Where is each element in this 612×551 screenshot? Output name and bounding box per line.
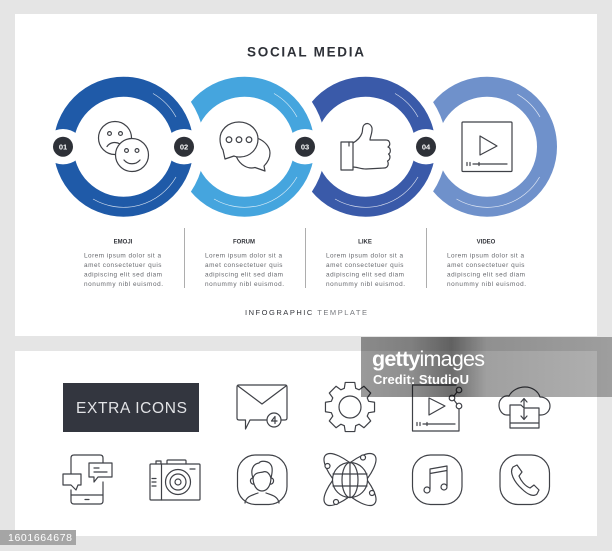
extra icons label	[63, 383, 199, 432]
column text: video: amet consectetuer quis	[447, 262, 524, 269]
icon: mobile chat	[63, 455, 112, 504]
column text: emoji: nonummy nibl euismod.	[84, 281, 163, 288]
panel: social media infographic	[15, 14, 597, 336]
watermark: getty images	[361, 337, 612, 397]
badge 03	[295, 137, 315, 157]
badge 04	[416, 137, 436, 157]
icon: camera	[150, 460, 200, 500]
watermark: getty images: gettyimages	[372, 347, 485, 371]
column text: video: nonummy nibl euismod.	[447, 281, 526, 288]
column text: like: amet consectetuer quis	[326, 262, 404, 269]
icon: video player	[462, 122, 512, 172]
column text: emoji: Lorem ipsum dolor sit a	[84, 252, 161, 260]
icon: music	[412, 455, 462, 504]
column text: forum: FORUM	[233, 239, 255, 245]
icon: mail bubble	[237, 385, 287, 429]
ring 2	[184, 87, 304, 207]
footer label: INFOGRAPHIC TEMPLATE	[245, 308, 367, 317]
column text: forum: Lorem ipsum dolor sit a	[205, 252, 282, 260]
badge 01: 01	[59, 142, 67, 152]
panel: extra icons	[15, 351, 597, 536]
watermark: getty images: Credit: StudioU	[373, 372, 469, 387]
badge 04: 04	[422, 142, 431, 152]
icon: video share	[412, 385, 462, 431]
column text: forum	[205, 239, 284, 288]
column text: forum: amet consectetuer quis	[205, 262, 282, 269]
icon: emoji faces	[98, 122, 148, 172]
ring chain	[42, 66, 547, 228]
badge 02	[174, 137, 194, 157]
column text: forum: adipiscing elit sed diam	[205, 272, 283, 278]
ring 1	[64, 87, 184, 207]
icon: globe network	[317, 446, 383, 513]
icon: thumbs up	[341, 124, 390, 170]
watermark: image id: 1601664678	[8, 532, 72, 544]
column text: emoji: adipiscing elit sed diam	[84, 272, 162, 278]
icon: gear	[325, 382, 375, 432]
column text: like	[326, 239, 405, 288]
column text: video: VIDEO	[477, 239, 496, 245]
column text: emoji: EMOJI	[114, 239, 133, 245]
icon: cloud transfer	[499, 387, 550, 428]
column text: like: adipiscing elit sed diam	[326, 272, 404, 278]
ring 3	[306, 87, 426, 207]
badge 03: 03	[301, 142, 309, 152]
column text: video	[447, 239, 526, 288]
column text: like: LIKE	[358, 239, 372, 245]
icon: forum bubbles	[220, 122, 270, 171]
ring 4	[427, 87, 547, 207]
badge 01	[53, 137, 73, 157]
column text: emoji	[84, 239, 163, 288]
column text: like: nonummy nibl euismod.	[326, 281, 405, 288]
watermark: image id	[0, 530, 76, 545]
column text: emoji: amet consectetuer quis	[84, 262, 162, 269]
badge 02: 02	[180, 142, 188, 152]
column text: forum: nonummy nibl euismod.	[205, 281, 284, 288]
column text: like: Lorem ipsum dolor sit a	[326, 252, 403, 260]
column text: video: adipiscing elit sed diam	[447, 272, 525, 278]
column text: video: Lorem ipsum dolor sit a	[447, 252, 524, 260]
icon: person	[238, 455, 287, 504]
icon: phone	[500, 455, 550, 504]
extra icons label: EXTRA ICONS	[76, 400, 187, 417]
title: SOCIAL MEDIA	[247, 44, 364, 60]
